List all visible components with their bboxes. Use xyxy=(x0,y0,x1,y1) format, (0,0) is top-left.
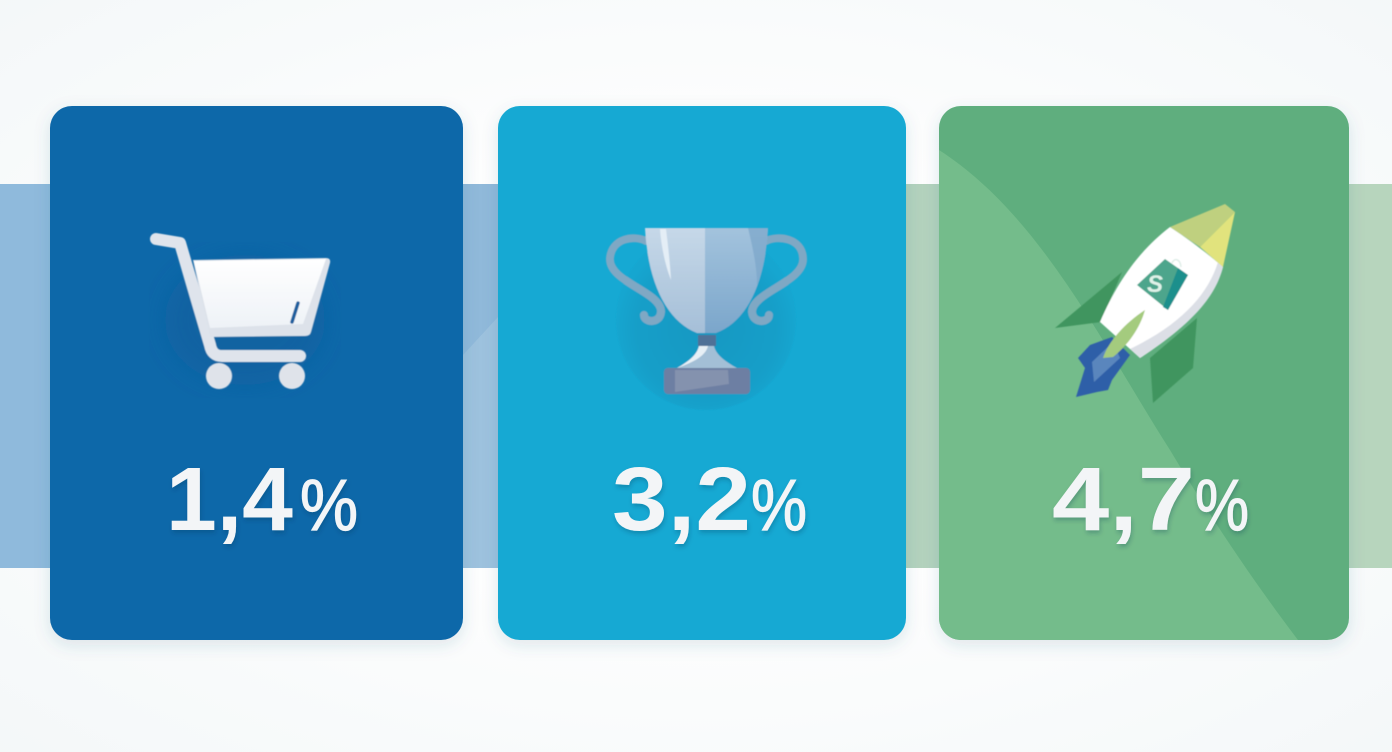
icon: shopping bag with S: S xyxy=(1147,271,1163,298)
stat: 1,4%: % xyxy=(300,466,358,546)
stat: 3,2% xyxy=(612,450,807,550)
stat: 1,4% xyxy=(166,450,358,550)
icon: shopping bag with S xyxy=(1137,259,1188,310)
stat: 4,7%: 4,7 xyxy=(1052,450,1195,550)
stat: 3,2%: % xyxy=(751,466,807,546)
stat: 1,4%: 1,4 xyxy=(166,450,293,550)
stat: 3,2%: 3,2 xyxy=(612,450,751,550)
background band xyxy=(0,184,1392,568)
icon: trophy xyxy=(610,228,803,410)
panel: cyan card, 3,2% xyxy=(498,106,906,640)
icon: shopping cart xyxy=(156,239,330,389)
panel: green card, 4,7% xyxy=(939,106,1349,640)
stat: 4,7% xyxy=(1052,450,1249,550)
stat: 4,7%: % xyxy=(1195,466,1249,546)
panel: blue card, 1,4% xyxy=(50,106,463,640)
icon: rocket xyxy=(1055,204,1235,403)
